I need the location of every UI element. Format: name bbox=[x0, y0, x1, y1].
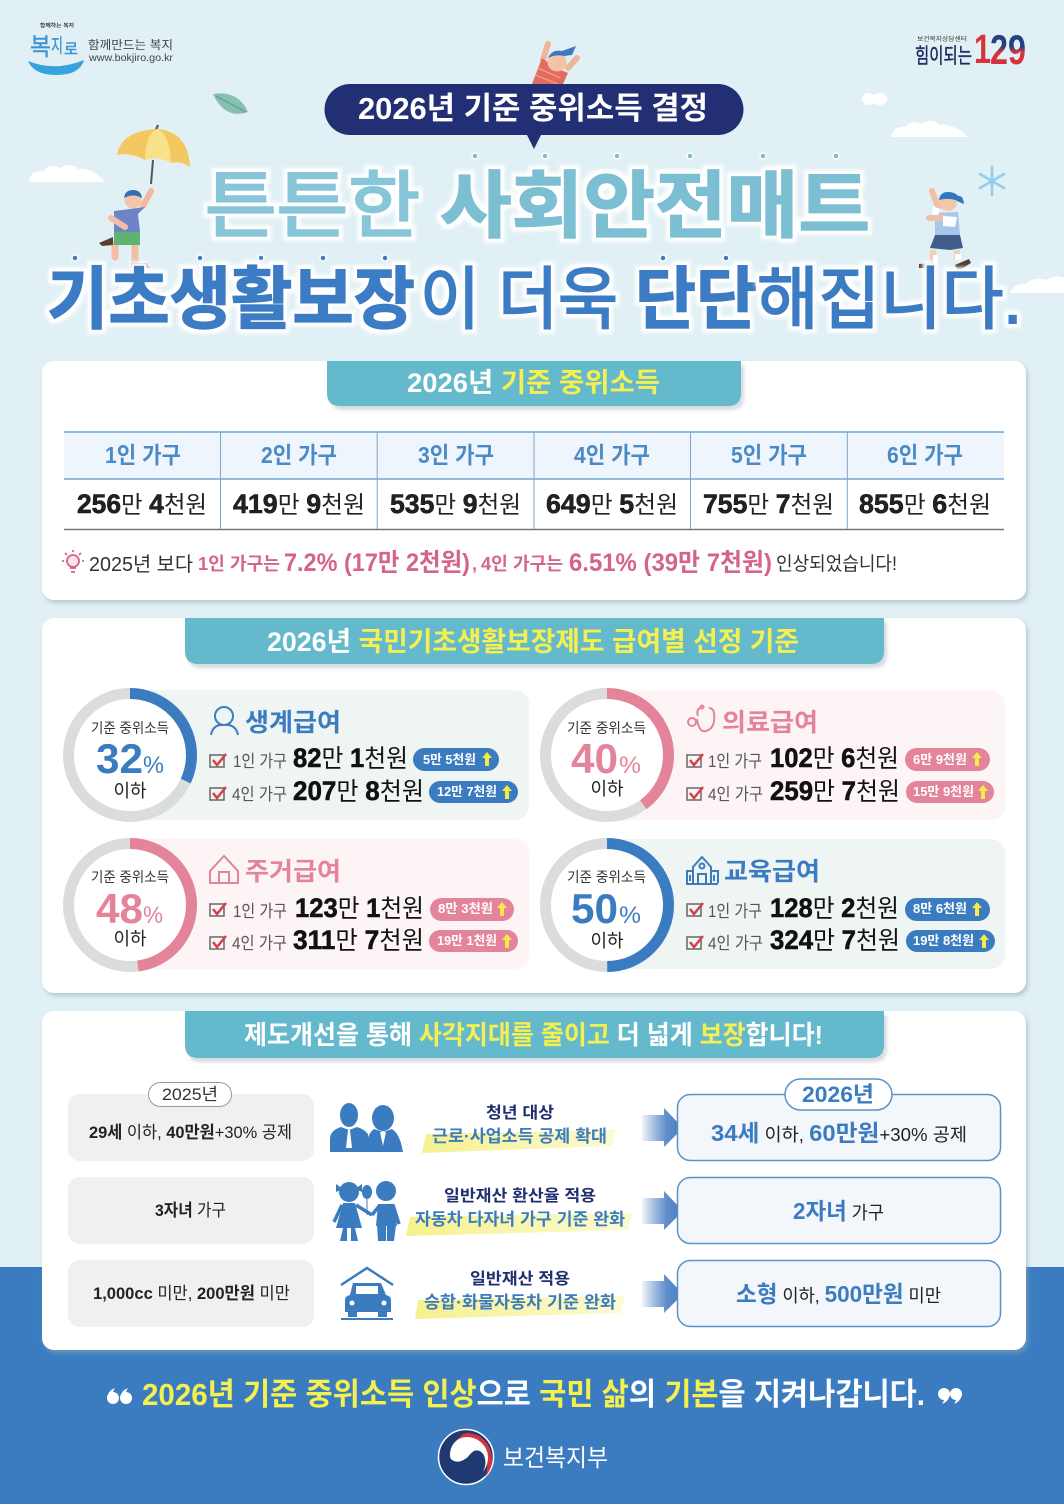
donut 48%: 이하 bbox=[113, 929, 147, 949]
title line 2: 기초생활보장 bbox=[47, 262, 415, 338]
table: household income: 3인 가구 bbox=[418, 442, 494, 468]
row 3: vehicles bbox=[68, 1260, 1000, 1327]
table: household income: 1인 가구 bbox=[105, 442, 181, 468]
icon: light bulb bbox=[62, 550, 84, 572]
heading banner: median income: 2026년 기준 중위소득 bbox=[407, 368, 660, 398]
row: 4 persons: 4인 가구 bbox=[232, 785, 287, 804]
box: 2026 youth: 34세 이하, 60만원+30% 공제 bbox=[711, 1120, 967, 1146]
text: multi-child: 일반재산 환산율 적용 bbox=[444, 1187, 596, 1205]
heading banner: improvements: 제도개선을 통해 사각지대를 줄이고 더 넓게 보장합니다! bbox=[244, 1020, 823, 1050]
row: 4 persons: 207만 8천원 bbox=[293, 776, 424, 806]
card: housing benefit 48% bbox=[63, 838, 529, 972]
donut 40%: 기준 중위소득 bbox=[567, 720, 646, 736]
speech bubble header: 2026년 기준 중위소득 결정 bbox=[358, 91, 708, 126]
row 2: multi-child households bbox=[68, 1177, 1000, 1244]
row: 1 person bbox=[210, 893, 514, 923]
table: household income: 535만 9천원 bbox=[390, 489, 521, 519]
icon: house bbox=[210, 856, 238, 883]
logo: ministry of health and welfare: 보건복지부 bbox=[503, 1445, 608, 1472]
row: 4 persons: 4인 가구 bbox=[708, 785, 763, 804]
title line 2: 해집니다. bbox=[757, 262, 1022, 338]
row: 1 person: 6만 9천원 bbox=[913, 752, 967, 767]
row: 4 persons: 12만 7천원 bbox=[437, 784, 497, 799]
note: increase rate: 6.51% (39만 7천원) bbox=[569, 549, 772, 577]
background bottom band bbox=[0, 1267, 1064, 1504]
character: child with umbrella bbox=[99, 125, 190, 268]
donut 50% bbox=[540, 838, 674, 972]
row: 4 persons bbox=[210, 776, 518, 806]
arrow bbox=[642, 1108, 683, 1147]
icon: closing quote bbox=[938, 1388, 962, 1404]
logo: ministry of health and welfare bbox=[438, 1430, 608, 1484]
title line 2: 단단 bbox=[635, 262, 757, 338]
card: medical benefit 40% bbox=[540, 688, 1005, 822]
table: household income: 649만 5천원 bbox=[546, 489, 678, 519]
donut 32%: 이하 bbox=[113, 781, 147, 801]
donut 48% bbox=[63, 838, 197, 972]
donut 48%: 기준 중위소득 bbox=[91, 869, 169, 885]
box: 2 children bbox=[678, 1178, 1000, 1244]
box: small car bbox=[678, 1260, 1000, 1326]
icon: car in garage bbox=[341, 1268, 393, 1320]
heading banner: median income bbox=[327, 361, 741, 406]
heading banner: criteria bbox=[185, 618, 884, 664]
row: 1 person bbox=[687, 893, 990, 923]
row: 4 persons: 311만 7천원 bbox=[293, 925, 424, 955]
icon: opening quote bbox=[107, 1388, 132, 1404]
title line 1: 사회안전매트 bbox=[440, 166, 870, 247]
donut 50%: % bbox=[619, 902, 641, 929]
donut 40%: 이하 bbox=[590, 779, 624, 799]
table: household income: 256만 4천원 bbox=[77, 489, 207, 519]
table: household income: 755만 7천원 bbox=[703, 489, 834, 519]
tag: 2026: 2026년 bbox=[802, 1082, 874, 1107]
heading: livelihood: 생계급여 bbox=[245, 709, 341, 737]
logo: 129 bbox=[915, 26, 1026, 73]
text: multi-child: 자동차 다자녀 가구 기준 완화 bbox=[415, 1210, 625, 1229]
row: 1 person: 1인 가구 bbox=[708, 902, 762, 921]
box: 2025 youth bbox=[68, 1094, 314, 1161]
box: small car: 소형 이하, 500만원 미만 bbox=[736, 1281, 941, 1307]
heading banner: criteria: 2026년 국민기초생활보장제도 급여별 선정 기준 bbox=[267, 627, 799, 657]
panel: system improvements bbox=[42, 1011, 1026, 1350]
row: 4 persons: 19만 1천원 bbox=[437, 933, 497, 948]
table: household income: 6인 가구 bbox=[887, 442, 963, 468]
heading: housing: 주거급여 bbox=[245, 858, 341, 886]
arrow bbox=[642, 1191, 683, 1230]
footer slogan: 2026년 기준 중위소득 인상으로 국민 삶의 기본을 지켜나갑니다. bbox=[142, 1377, 925, 1412]
note: increase rate: 7.2% (17만 2천원) bbox=[284, 549, 470, 577]
text: vehicles bbox=[415, 1270, 625, 1319]
text: vehicles: 승합·화물자동차 기준 완화 bbox=[424, 1293, 616, 1312]
box: 3 children bbox=[68, 1177, 314, 1244]
row: 4 persons bbox=[687, 776, 994, 806]
box: 3 children: 3자녀 가구 bbox=[155, 1201, 226, 1220]
logo: 129: 29 bbox=[990, 26, 1026, 73]
row: 1 person bbox=[210, 743, 499, 773]
text: youth bbox=[422, 1104, 616, 1153]
heading banner: improvements bbox=[185, 1011, 884, 1058]
row 1: youth bbox=[68, 1079, 1000, 1161]
row: 4 persons: 15만 9천원 bbox=[913, 784, 974, 799]
logo: bokjiro: 복 bbox=[30, 34, 51, 61]
note: increase rate bbox=[89, 549, 897, 577]
donut 50%: 50 bbox=[571, 885, 618, 932]
donut 32% bbox=[63, 688, 197, 822]
icon: stethoscope bbox=[688, 706, 714, 731]
row: 4 persons: 4인 가구 bbox=[708, 934, 763, 953]
logo: bokjiro: 지 bbox=[51, 35, 63, 57]
box: 1000cc: 1,000cc 미만, 200만원 미만 bbox=[93, 1284, 290, 1303]
row: 1 person: 8만 3천원 bbox=[438, 901, 493, 916]
clouds bbox=[29, 93, 1064, 293]
logo: 129: 보건복지상담센터 bbox=[917, 35, 967, 43]
icon: children bbox=[334, 1181, 399, 1241]
row: 1 person: 128만 2천원 bbox=[770, 893, 899, 923]
title line 1 bbox=[205, 153, 870, 247]
table: household income: 4인 가구 bbox=[574, 442, 650, 468]
table: household income: 2인 가구 bbox=[261, 442, 337, 468]
logo: bokjiro: www.bokjiro.go.kr bbox=[88, 52, 174, 64]
row: 4 persons: 19만 8천원 bbox=[913, 933, 974, 948]
title line 2 bbox=[47, 255, 1022, 338]
speech bubble header bbox=[324, 84, 744, 149]
row: 1 person: 1인 가구 bbox=[233, 902, 287, 921]
donut 48%: 48 bbox=[96, 885, 143, 932]
logo: bokjiro: 함께만드는 복지 bbox=[88, 38, 173, 52]
logo: 129: 1 bbox=[974, 26, 991, 72]
row: 1 person: 5만 5천원 bbox=[423, 752, 476, 767]
donut 32%: 32 bbox=[96, 735, 143, 782]
donut 40%: % bbox=[619, 752, 641, 779]
tag: 2025: 2025년 bbox=[162, 1085, 218, 1104]
note: increase rate: , bbox=[472, 554, 477, 574]
row: 1 person: 8만 6천원 bbox=[913, 901, 967, 916]
row: 1 person bbox=[687, 743, 990, 773]
snowflake bbox=[980, 167, 1004, 195]
row: 4 persons bbox=[210, 925, 518, 955]
text: multi-child bbox=[406, 1187, 632, 1236]
logo: 129: 힘이되는 bbox=[915, 45, 972, 68]
row: 1 person: 123만 1천원 bbox=[295, 893, 424, 923]
row: 4 persons: 259만 7천원 bbox=[770, 776, 900, 806]
text: youth: 청년 대상 bbox=[486, 1104, 554, 1122]
box: 2 children: 2자녀 가구 bbox=[793, 1198, 884, 1224]
row: 1 person: 1인 가구 bbox=[233, 752, 287, 771]
logo: bokjiro: 로 bbox=[64, 41, 78, 58]
donut 40% bbox=[540, 688, 674, 822]
note: increase rate: 1인 가구는 bbox=[198, 554, 280, 574]
tag: 2025 bbox=[148, 1082, 232, 1106]
note: increase rate: 인상되었습니다! bbox=[776, 553, 897, 575]
row: 4 persons bbox=[687, 925, 995, 955]
title line 2: 이 더욱 bbox=[420, 262, 618, 338]
donut 48%: % bbox=[143, 902, 163, 929]
heading: education: 교육급여 bbox=[724, 858, 820, 886]
box: 2025 youth: 29세 이하, 40만원+30% 공제 bbox=[89, 1123, 292, 1142]
row: 1 person: 82만 1천원 bbox=[293, 743, 408, 773]
donut 32%: 기준 중위소득 bbox=[91, 720, 169, 736]
tag: 2026 bbox=[785, 1079, 892, 1110]
donut 50%: 이하 bbox=[590, 931, 624, 951]
box: 2026 youth bbox=[678, 1094, 1000, 1160]
donut 40%: 40 bbox=[571, 735, 618, 782]
note: increase rate: 2025년 보다 bbox=[89, 553, 193, 576]
text: youth: 근로·사업소득 공제 확대 bbox=[432, 1127, 607, 1146]
card: livelihood benefit 32% bbox=[63, 688, 529, 822]
character: child on right bbox=[919, 191, 971, 271]
table: household income bbox=[64, 432, 1004, 530]
heading: medical: 의료급여 bbox=[722, 709, 818, 737]
character: top child bbox=[532, 44, 577, 84]
note: increase rate: 4인 가구는 bbox=[481, 554, 563, 574]
icon: person bbox=[211, 707, 238, 735]
logo: bokjiro bbox=[28, 22, 174, 75]
icon: young adults bbox=[330, 1103, 403, 1152]
table: household income: 419만 9천원 bbox=[233, 489, 365, 519]
card: education benefit 50% bbox=[540, 838, 1005, 972]
table: household income: 855만 6천원 bbox=[859, 489, 991, 519]
donut 50%: 기준 중위소득 bbox=[567, 869, 646, 885]
row: 4 persons: 4인 가구 bbox=[232, 934, 287, 953]
donut 32%: % bbox=[143, 752, 164, 779]
panel: selection criteria bbox=[42, 618, 1026, 993]
logo: bokjiro: 함께하는 복지 bbox=[40, 22, 74, 29]
leaf bbox=[213, 93, 248, 114]
row: 1 person: 102만 6천원 bbox=[770, 743, 899, 773]
row: 4 persons: 324만 7천원 bbox=[770, 925, 900, 955]
table: household income: 5인 가구 bbox=[731, 442, 807, 468]
title line 1: 튼튼한 bbox=[205, 166, 420, 247]
panel: 2026 median income bbox=[42, 361, 1026, 600]
box: 1000cc bbox=[68, 1260, 314, 1327]
text: vehicles: 일반재산 적용 bbox=[470, 1270, 570, 1288]
icon: school bbox=[686, 857, 718, 884]
arrow bbox=[642, 1274, 683, 1313]
row: 1 person: 1인 가구 bbox=[708, 752, 762, 771]
